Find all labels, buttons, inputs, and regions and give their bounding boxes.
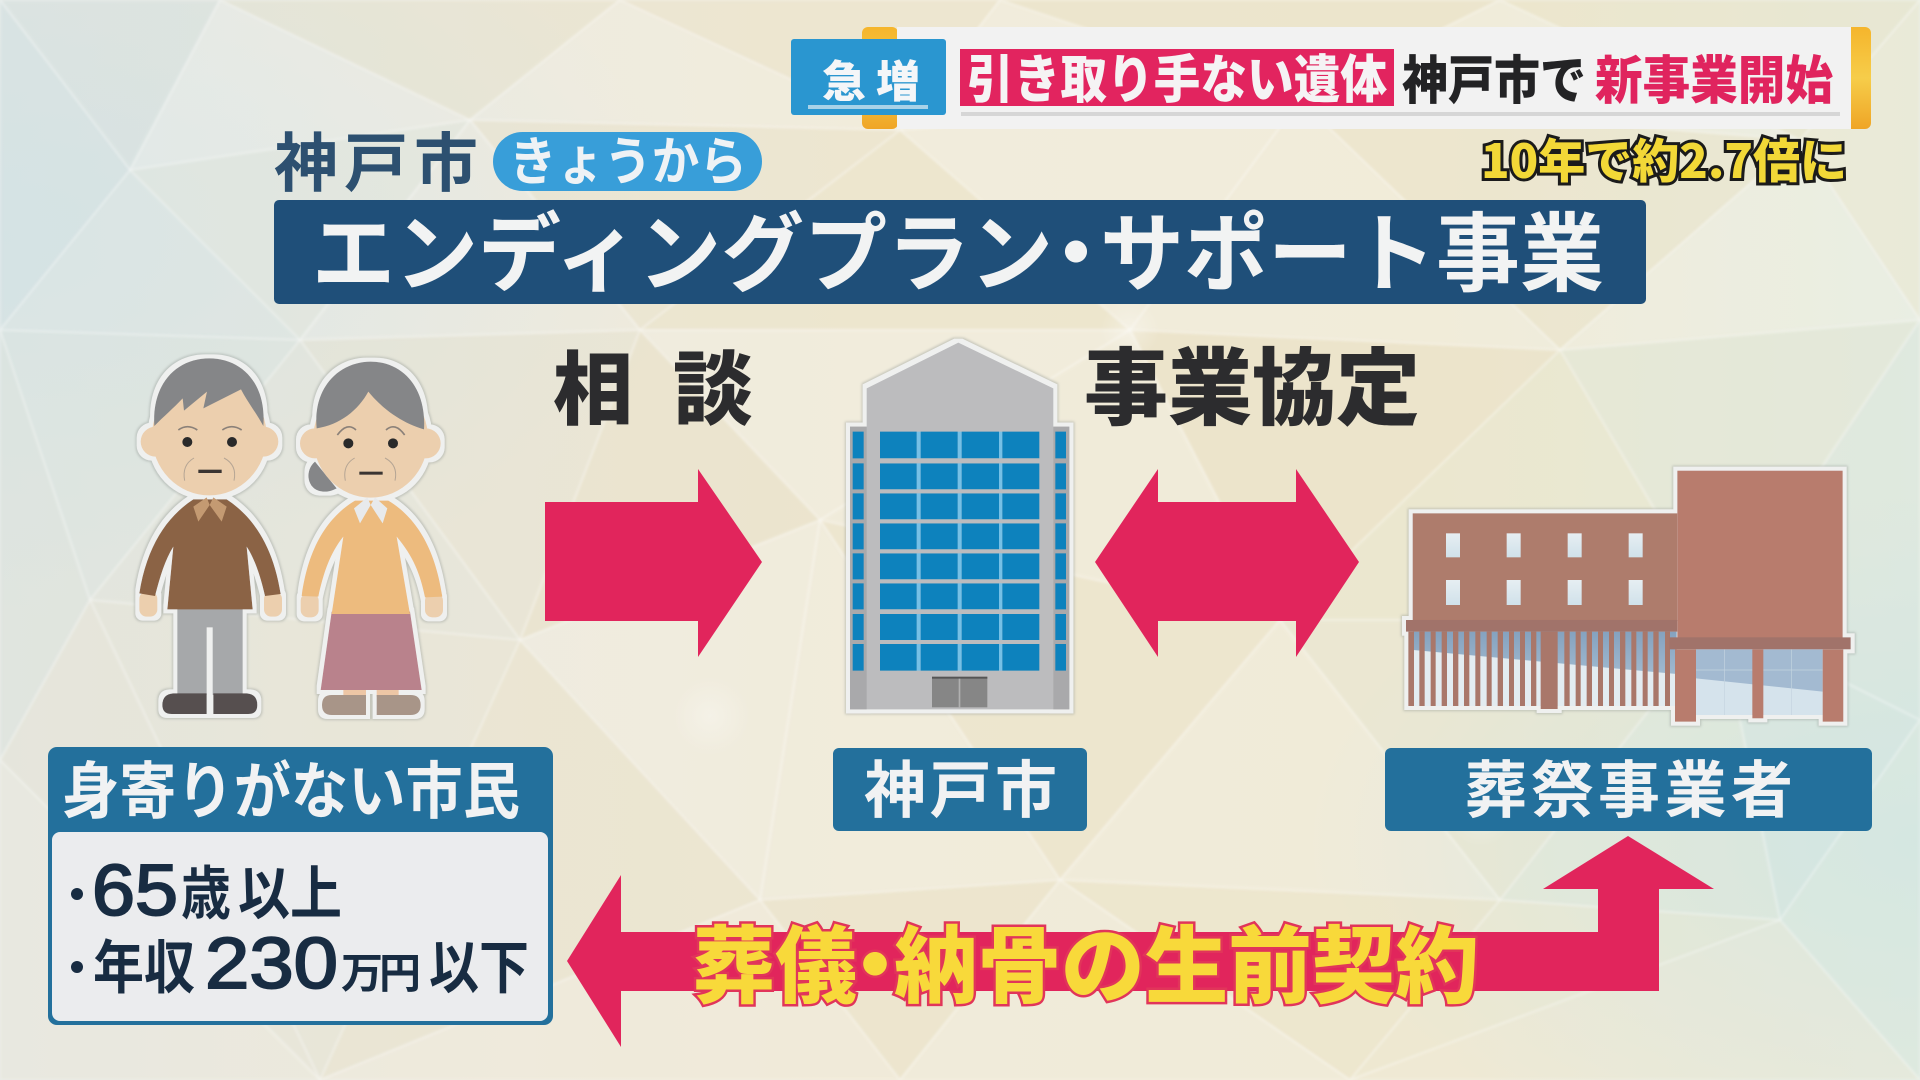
condition: 年収230万円以下: 以下 bbox=[429, 921, 529, 1005]
icon: city hall building bbox=[850, 343, 1069, 709]
hands bbox=[301, 593, 319, 617]
icon: funeral operator building bbox=[1406, 471, 1851, 722]
hair bbox=[316, 362, 424, 429]
title bar bbox=[274, 184, 1646, 309]
tag: 急増 bbox=[791, 39, 946, 115]
headline highlight: 引き取り手ない遺体: 引き取り手ない遺体 bbox=[967, 38, 1387, 113]
label: 葬儀・納骨の生前契約: 納骨の生前契約 bbox=[894, 900, 1479, 1021]
icon: elderly man bbox=[139, 358, 282, 714]
window mullion glow bbox=[917, 432, 1002, 671]
label: 相談: 相 談 bbox=[553, 326, 753, 442]
banner gold end caps bbox=[862, 27, 1871, 129]
left wing bbox=[1413, 513, 1677, 621]
sweater bbox=[139, 499, 281, 609]
subhead: 10年で約2.7倍に: 10年で約2.7倍に bbox=[1481, 123, 1847, 192]
condition: 65歳以上 bbox=[71, 847, 342, 931]
panel white body bbox=[52, 832, 548, 1021]
pill: きょうから: きょうから bbox=[509, 120, 747, 195]
trousers bbox=[177, 607, 243, 695]
entrance glass bbox=[1696, 649, 1823, 715]
legs and shoes bbox=[343, 688, 366, 697]
vertical louvres bbox=[1408, 632, 1670, 709]
heading: 神戸市: 神戸市 bbox=[274, 113, 478, 205]
man arms and hands bbox=[139, 592, 157, 617]
condition: 年収230万円以下 bbox=[71, 921, 529, 1005]
label box: 葬祭事業者 bbox=[1385, 740, 1872, 831]
condition: 年収230万円以下: 万円 bbox=[341, 940, 421, 1001]
panel heading: 身寄りがない市民 bbox=[62, 741, 520, 831]
title bar: サポート事業 bbox=[1100, 184, 1604, 309]
entrance door bbox=[932, 677, 987, 707]
window horizontal bands bbox=[880, 458, 1039, 644]
condition: 65歳以上: 歳 bbox=[181, 847, 231, 931]
ears and face bbox=[300, 428, 330, 458]
top banner bbox=[791, 27, 1871, 129]
shoes bbox=[162, 693, 207, 714]
hair bbox=[154, 358, 264, 426]
icon: elderly couple bbox=[139, 358, 443, 715]
banner grey rule bbox=[961, 112, 1840, 116]
condition: 年収230万円以下: 230 bbox=[205, 924, 338, 1004]
entrance columns bbox=[1675, 649, 1843, 722]
label box: 葬祭事業者: 葬祭事業者 bbox=[1465, 740, 1793, 830]
glass curtain wall bbox=[1413, 632, 1677, 706]
windows bbox=[853, 432, 1066, 671]
upper windows bbox=[1446, 533, 1643, 605]
right beam bbox=[1669, 637, 1851, 649]
condition: 65歳以上: 以上 bbox=[238, 847, 342, 931]
headline: 新事業開始: 新事業開始 bbox=[1595, 39, 1833, 114]
right tower bbox=[1677, 471, 1843, 638]
building body bbox=[850, 343, 1069, 709]
title bar: ・ bbox=[1033, 184, 1119, 309]
ears and face bbox=[141, 427, 171, 457]
arrow: citizen to city bbox=[545, 469, 762, 657]
banner white strip bbox=[897, 27, 1851, 129]
side wings bbox=[850, 427, 1069, 709]
label: 事業協定: 事業協定 bbox=[1084, 322, 1420, 443]
label: 葬儀・納骨の生前契約: 葬儀 bbox=[693, 900, 857, 1021]
title bar: エンディングプラン bbox=[312, 184, 1053, 309]
arrow: contract between citizens and funeral operators bbox=[567, 836, 1714, 1047]
skirt bbox=[321, 612, 422, 690]
condition: 65歳以上: 65 bbox=[92, 851, 178, 931]
label: 葬儀・納骨の生前契約: ・ bbox=[833, 900, 917, 1021]
condition: 年収230万円以下: 年収 bbox=[93, 921, 195, 1005]
headline: 神戸市で: 神戸市で bbox=[1402, 39, 1586, 114]
facial features bbox=[343, 438, 353, 448]
arrow: city and funeral operators (double-headed) bbox=[1095, 469, 1359, 657]
label box: 神戸市: 神戸市 bbox=[864, 740, 1057, 830]
sweater bbox=[302, 501, 442, 614]
left beam bbox=[1406, 620, 1677, 632]
facial features bbox=[182, 437, 192, 447]
icon: elderly woman bbox=[300, 362, 443, 715]
hair bun bbox=[308, 462, 337, 492]
tag: 急増: 急増 bbox=[822, 46, 920, 110]
panel: 身寄りがない市民 bbox=[48, 741, 553, 1025]
